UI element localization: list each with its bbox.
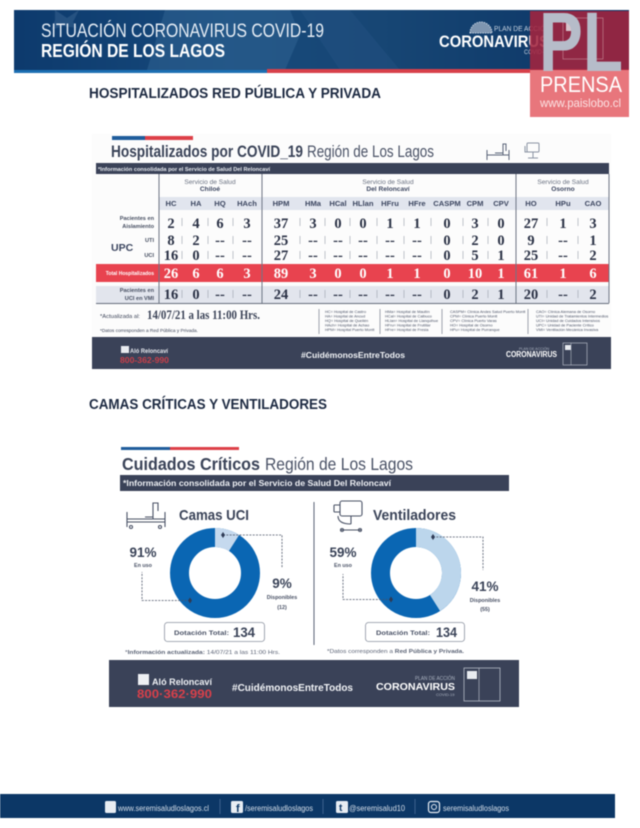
- header title: REGIÓN DE LOS LAGOS: [41, 40, 225, 61]
- column header row: HC: [166, 199, 177, 208]
- hospital legend: CAO= Clínica Alemana de Osorno: [536, 309, 595, 314]
- row: aislamiento: 1: [386, 216, 394, 232]
- row: UCI: --: [558, 248, 568, 264]
- row: UCI: 0: [192, 248, 200, 264]
- panel footer band: PLAN DE ACCIÓN: [415, 675, 455, 682]
- hospital legend: CASPM= Clínica Andes Salud Puerto Montt: [450, 309, 526, 314]
- row: UTI: [167, 233, 597, 249]
- service headers: Servicio de Salud: [362, 179, 414, 186]
- column header row: HMa: [305, 199, 322, 208]
- row: UCI en VMI: --: [385, 287, 395, 303]
- callout: camas uci en uso: En uso: [134, 563, 153, 569]
- hospital legend: HO= Hospital de Osorno: [450, 322, 492, 328]
- row: total hospitalizados: 0: [443, 266, 451, 282]
- update note: *Actualizada al:: [100, 314, 140, 320]
- row labels: UCI en VMI: [125, 296, 154, 302]
- row: total hospitalizados: 26: [164, 266, 178, 282]
- hospital legend: HFru= Hospital de Frutillar: [385, 322, 431, 328]
- service headers: Chiloé: [200, 186, 220, 193]
- hospital legend: UPC= Unidad de Paciente Crítico: [536, 322, 594, 328]
- table footer band: Aló Reloncaví: [130, 348, 168, 355]
- service headers: Del Reloncaví: [366, 186, 411, 193]
- watermark: PL Prensa: [530, 0, 629, 117]
- header banner: [14, 10, 629, 73]
- row: UCI en VMI: 24: [274, 287, 288, 303]
- row labels: [106, 216, 155, 302]
- hospital legend: HC= Hospital de Castro: [325, 309, 366, 314]
- info bar: *Información consolidada por el Servicio de Salud Del Reloncaví: [123, 479, 392, 488]
- row: UCI: 5: [471, 248, 479, 264]
- callout: camas uci disponibles: (12): [277, 605, 287, 611]
- row: aislamiento: 0: [497, 216, 505, 232]
- box: dotacion camas: 134: [233, 625, 255, 640]
- box: dotacion ventiladores: 134: [436, 625, 457, 640]
- panel footer band: COVID-19: [436, 692, 455, 697]
- hospital legend: HFre= Hospital de Fresia: [385, 327, 429, 332]
- note: datos corresponden: *Datos corresponden a Red Pública y Privada.: [327, 649, 465, 655]
- facebook link: f: [236, 803, 240, 815]
- heading: camas criticas: CAMAS CRÍTICAS Y VENTILADORES: [89, 396, 327, 413]
- column header row: HFre: [408, 199, 426, 208]
- hospital legend: HPM= Hospital Puerto Montt: [325, 327, 375, 332]
- row: aislamiento: [167, 216, 597, 232]
- hospital legend: UTI= Unidad de Tratamientos Intermedios: [536, 314, 608, 318]
- row: aislamiento: 0: [334, 216, 342, 232]
- footer social bar: [0, 794, 615, 818]
- row: total hospitalizados: [164, 266, 597, 282]
- row: aislamiento: 3: [243, 216, 251, 232]
- table footer band: #CuidémonosEntreTodos: [301, 350, 405, 360]
- donut: ventiladores: [380, 538, 452, 608]
- hospital legend: HA= Hospital de Ancud: [325, 314, 365, 318]
- row: UTI: --: [358, 233, 368, 249]
- row: UTI: 8: [167, 233, 175, 249]
- table footer band: CORONAVIRUS: [506, 350, 558, 359]
- panel: hospitalizados table: [92, 134, 611, 370]
- row: total hospitalizados: 61: [524, 266, 538, 282]
- panel title: Cuidados Críticos: [122, 454, 260, 474]
- callout: ventiladores en uso: 59%: [329, 545, 357, 560]
- label: ventiladores: Ventiladores: [373, 507, 456, 524]
- row: total hospitalizados: 89: [274, 266, 288, 282]
- header title: SITUACIÓN CORONAVIRUS COVID-19: [41, 20, 324, 42]
- column header row: HAch: [237, 199, 257, 208]
- row: UCI en VMI: --: [215, 287, 225, 303]
- row backgrounds: [96, 264, 609, 304]
- callout: ventiladores disponibles: 41%: [471, 579, 499, 594]
- table footer band: 800-362-990: [120, 355, 169, 365]
- callout: ventiladores disponibles: Disponibles: [470, 598, 500, 604]
- row: aislamiento: 3: [589, 216, 597, 232]
- instagram link: [428, 802, 509, 813]
- row labels: UPC: [111, 242, 134, 254]
- hospital legend: HMa= Hospital de Maullín: [385, 309, 430, 314]
- row labels: Total Hospitalizados: [106, 271, 154, 277]
- hospital legend: CPM= Clínica Puerto Montt: [450, 314, 498, 318]
- row: UCI en VMI: 16: [164, 287, 178, 303]
- column header row: HPu: [555, 199, 571, 208]
- row: UTI: --: [215, 233, 225, 249]
- box: dotacion camas: [164, 622, 264, 642]
- table footer band: PLAN DE ACCIÓN: [519, 346, 550, 351]
- service headers: [184, 179, 589, 193]
- column header row: HA: [191, 199, 202, 208]
- row: total hospitalizados: 6: [216, 266, 224, 282]
- row: UCI en VMI: --: [558, 287, 568, 303]
- row: UTI: 1: [589, 233, 597, 249]
- column header row: HCal: [329, 199, 347, 208]
- box: dotacion ventiladores: [366, 622, 464, 642]
- table footer band: [92, 337, 611, 369]
- row: UCI en VMI: 2: [589, 287, 597, 303]
- header logo: plan de accion coronavirus: PLAN DE ACCIÓN: [494, 24, 550, 33]
- table title: Región de Los Lagos: [307, 142, 434, 161]
- twitter link: t: [339, 803, 343, 814]
- hospital legend: CPV= Clínica Puerto Varas: [450, 318, 497, 323]
- row: aislamiento: 2: [167, 216, 175, 232]
- row: UCI: 0: [443, 248, 451, 264]
- hospital legend: HCal= Hospital de Calbuco: [385, 314, 432, 318]
- row: total hospitalizados: 3: [309, 266, 317, 282]
- info bar: [120, 475, 509, 491]
- row: aislamiento: 37: [274, 216, 288, 232]
- row: UTI: --: [558, 233, 568, 249]
- row: total hospitalizados: 6: [589, 266, 597, 282]
- web link: www.seremisaludloslagos.cl: [117, 804, 209, 813]
- row: UCI: --: [333, 248, 343, 264]
- row: UCI en VMI: --: [308, 287, 318, 303]
- row: aislamiento: 3: [471, 216, 479, 232]
- column header row: HO: [525, 199, 537, 208]
- row: UCI en VMI: 0: [192, 287, 200, 303]
- panel title: Región de Los Lagos: [265, 454, 413, 474]
- row: UCI en VMI: --: [412, 287, 422, 303]
- row: total hospitalizados: 0: [334, 266, 342, 282]
- row labels: UTI: [145, 238, 154, 244]
- row: total hospitalizados: 3: [243, 266, 251, 282]
- panel footer band: 800·362·990: [137, 687, 212, 701]
- row: UCI: [164, 248, 597, 264]
- row: UTI: 0: [497, 233, 505, 249]
- row: UTI: --: [333, 233, 343, 249]
- row: total hospitalizados: 1: [497, 266, 505, 282]
- callout: camas uci en uso: 91%: [129, 545, 157, 560]
- row: UCI: --: [215, 248, 225, 264]
- row: total hospitalizados: 6: [192, 266, 200, 282]
- box: dotacion ventiladores: Dotación Total:: [376, 630, 430, 637]
- column header row: CPM: [467, 199, 483, 208]
- column header row: CASPM: [433, 199, 461, 208]
- callout: camas uci disponibles: Disponibles: [267, 595, 297, 601]
- icon: ventilator: [334, 501, 362, 532]
- instagram link: seremisaludloslagos: [443, 804, 509, 813]
- hospital legend: HQ= Hospital de Queilén: [325, 318, 368, 323]
- box: dotacion camas: Dotación Total:: [174, 630, 229, 637]
- callout: camas uci disponibles: 9%: [272, 576, 292, 591]
- table title: Hospitalizados por COVID_19: [111, 142, 303, 161]
- row: UCI: --: [308, 248, 318, 264]
- callout: ventiladores en uso: [329, 545, 393, 602]
- row: UCI: --: [412, 248, 422, 264]
- row: UCI en VMI: 1: [497, 287, 505, 303]
- twitter link: @seremisalud10: [349, 804, 406, 813]
- panel footer band: CORONAVIRUS: [376, 681, 455, 693]
- row: UCI en VMI: 0: [443, 287, 451, 303]
- hospital legend: HPu= Hospital de Purranque: [450, 327, 500, 332]
- row: UTI: 0: [443, 233, 451, 249]
- callout: ventiladores disponibles: [431, 534, 500, 613]
- info bar: [96, 163, 609, 174]
- row: UCI: --: [358, 248, 368, 264]
- label: camas uci: Camas UCI: [179, 507, 249, 524]
- row: UCI en VMI: --: [242, 287, 252, 303]
- row: UCI en VMI: --: [333, 287, 343, 303]
- panel footer band: Aló Reloncaví: [152, 677, 213, 687]
- watermark: PL Prensa: PRENSA: [540, 72, 622, 97]
- row: UCI: --: [385, 248, 395, 264]
- hospital legend: HAch= Hospital de Achao: [325, 322, 369, 328]
- row: UCI en VMI: [164, 287, 597, 303]
- row labels: UCI: [144, 253, 154, 259]
- row: UTI: --: [385, 233, 395, 249]
- hospital legend: HLlan= Hospital de Llanquihue: [385, 318, 438, 323]
- column header row: CAO: [585, 199, 602, 208]
- row: UTI: --: [308, 233, 318, 249]
- update note: *Datos corresponden a Red Pública y Privada.: [100, 328, 198, 334]
- row labels: Aislamiento: [122, 224, 155, 230]
- row: UCI: 25: [524, 248, 538, 264]
- callout: ventiladores en uso: En uso: [334, 563, 353, 569]
- row: UTI: 9: [527, 233, 535, 249]
- column header row: HFru: [381, 199, 399, 208]
- heading: hospitalizados: HOSPITALIZADOS RED PÚBLICA Y PRIVADA: [89, 84, 381, 102]
- row: total hospitalizados: 1: [559, 266, 567, 282]
- column header row: CPV: [493, 199, 510, 208]
- row: aislamiento: 4: [192, 216, 200, 232]
- row: total hospitalizados: 1: [413, 266, 421, 282]
- row: UTI: 2: [192, 233, 200, 249]
- row: aislamiento: 0: [359, 216, 367, 232]
- row: UTI: 25: [274, 233, 288, 249]
- facebook link: /seremisaludloslagos: [245, 804, 313, 813]
- row: aislamiento: 1: [559, 216, 567, 232]
- callout: camas uci disponibles: [221, 532, 297, 611]
- service headers: Servicio de Salud: [537, 179, 589, 186]
- hospital legend: [319, 309, 608, 334]
- row: aislamiento: 3: [309, 216, 317, 232]
- callout: camas uci en uso: [129, 545, 192, 604]
- row: aislamiento: 0: [443, 216, 451, 232]
- note: informacion actualizada: *Información actualizada: 14/07/21 a las 11:00 Hrs.: [125, 650, 280, 656]
- row: total hospitalizados: 10: [468, 266, 482, 282]
- header logo: plan de accion coronavirus: CORONAVIRUS: [439, 32, 549, 51]
- header title: [41, 20, 324, 61]
- row: aislamiento: 27: [524, 216, 538, 232]
- row: UCI: 16: [164, 248, 178, 264]
- row: total hospitalizados: 0: [359, 266, 367, 282]
- row: UCI en VMI: 20: [524, 287, 538, 303]
- column header row: [159, 197, 609, 210]
- column header row: HQ: [214, 199, 226, 208]
- row labels: Pacientes en: [120, 288, 155, 294]
- callout: ventiladores disponibles: (55): [480, 607, 490, 613]
- web link: [105, 801, 209, 813]
- facebook link: [231, 801, 313, 815]
- icon: hospital bed: [127, 503, 165, 528]
- panel title: [122, 454, 413, 474]
- row: UCI: 1: [497, 248, 505, 264]
- column header row: HPM: [273, 199, 289, 208]
- row: UCI: 27: [274, 248, 288, 264]
- row: UCI: --: [242, 248, 252, 264]
- row: UTI: --: [412, 233, 422, 249]
- panel: cuidados criticos: [109, 447, 519, 707]
- hospital legend: VMI= Ventilación Mecánica Invasiva: [536, 327, 599, 332]
- update note: [100, 308, 260, 334]
- service headers: Servicio de Salud: [184, 179, 236, 186]
- icon: ventilator: [525, 143, 539, 158]
- row: UTI: --: [242, 233, 252, 249]
- row: UCI: 2: [589, 248, 597, 264]
- header logo: plan de accion coronavirus: [439, 22, 551, 56]
- panel footer band: [109, 660, 519, 707]
- service headers: Osorno: [551, 186, 575, 193]
- column separators: [159, 174, 609, 303]
- update note: 14/07/21 a las 11:00 Hrs.: [147, 308, 260, 322]
- row: aislamiento: 1: [413, 216, 421, 232]
- twitter link: [336, 801, 406, 814]
- row: total hospitalizados: 1: [386, 266, 394, 282]
- info bar: *Información consolidada por el Servicio de Salud Del Reloncaví: [98, 167, 271, 173]
- row: UCI en VMI: 2: [471, 287, 479, 303]
- panel footer band: #CuidémonosEntreTodos: [232, 683, 353, 694]
- icon: bed: [487, 144, 509, 160]
- watermark: PL Prensa: www.paislobo.cl: [539, 96, 621, 110]
- column header row: HLlan: [352, 199, 374, 208]
- hospital legend: UCI= Unidad de Cuidados Intensivos: [536, 318, 600, 323]
- header logo: plan de accion coronavirus: COVID-19: [524, 50, 551, 56]
- row: UTI: 2: [471, 233, 479, 249]
- row labels: Pacientes en: [120, 216, 155, 222]
- row: UCI en VMI: --: [358, 287, 368, 303]
- row: aislamiento: 6: [216, 216, 224, 232]
- donut: camas uci: [180, 538, 250, 608]
